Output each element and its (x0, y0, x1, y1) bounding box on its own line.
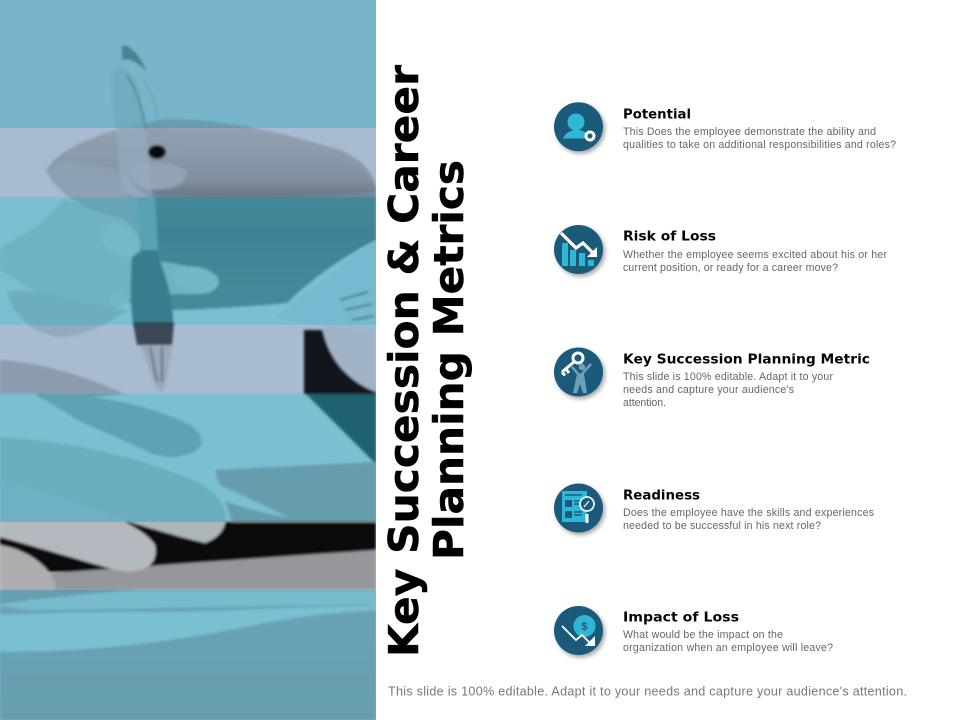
text: Readiness: Readiness (623, 488, 700, 504)
text: Readiness: needed to be successful in his next role? (623, 520, 821, 532)
notebook (215, 462, 376, 522)
text: Potential: This Does the employee demonstrate the ability and (623, 126, 876, 138)
icon: dollar coin with falling arrow: $ (581, 621, 588, 633)
title: Planning Metrics (425, 160, 473, 560)
text: Risk of Loss: current position, or ready for a career move? (623, 262, 838, 274)
text: Risk of Loss (623, 230, 887, 274)
metric: Potential (554, 102, 896, 151)
text: Readiness (623, 488, 874, 532)
icon: falling bar chart (554, 225, 603, 274)
icon: key and person (554, 348, 603, 396)
thumb (134, 182, 376, 197)
metric: Risk of Loss (554, 225, 887, 274)
metric: Impact of Loss (554, 606, 833, 655)
text: Key Succession Planning Metric: Key Succession Planning Metric (623, 352, 870, 368)
icon: dollar coin with falling arrow (554, 606, 603, 655)
lower hand fingers (0, 360, 125, 400)
metric: Readiness (554, 484, 874, 532)
icon: person with star badge (554, 102, 603, 151)
text: Risk of Loss: Risk of Loss (623, 230, 716, 244)
text: Key Succession Planning Metric: This slide is 100% editable. Adapt it to your (623, 371, 833, 383)
paper corner (274, 240, 376, 338)
dark sleeve and white cuff (304, 330, 376, 394)
table surface (0, 604, 376, 720)
panel: tinted photo of hand holding pen (0, 0, 376, 720)
back of upper hand (46, 119, 376, 310)
lower fingers (0, 200, 218, 309)
text: Key Succession Planning Metric: attention. (623, 397, 666, 409)
metric: Key Succession Planning Metric (554, 348, 870, 409)
teal and blue-gray colour bands (0, 0, 376, 720)
text: Impact of Loss: What would be the impact on the (623, 629, 783, 641)
text: Risk of Loss: Whether the employee seems excited about his or her (623, 249, 887, 261)
text: Key Succession Planning Metric (623, 352, 870, 409)
text: Potential: qualities to take on additional responsibilities and roles? (623, 139, 896, 151)
text: Potential: Potential (623, 108, 691, 122)
text: Readiness: Does the employee have the skills and experiences (623, 507, 874, 519)
text: Potential (623, 108, 896, 151)
icon: checklist with magnifier (554, 484, 603, 532)
text: Key Succession Planning Metric: needs and capture your audience's (623, 384, 794, 396)
text: Impact of Loss: organization when an employee will leave? (623, 642, 833, 654)
footer note: This slide is 100% editable. Adapt it to your needs and capture your audience's attention. (388, 684, 907, 698)
text: Impact of Loss (623, 610, 833, 654)
text: Impact of Loss: Impact of Loss (623, 610, 739, 626)
title (380, 64, 473, 657)
pen body (117, 74, 152, 198)
title: Key Succession & Career (380, 64, 428, 657)
